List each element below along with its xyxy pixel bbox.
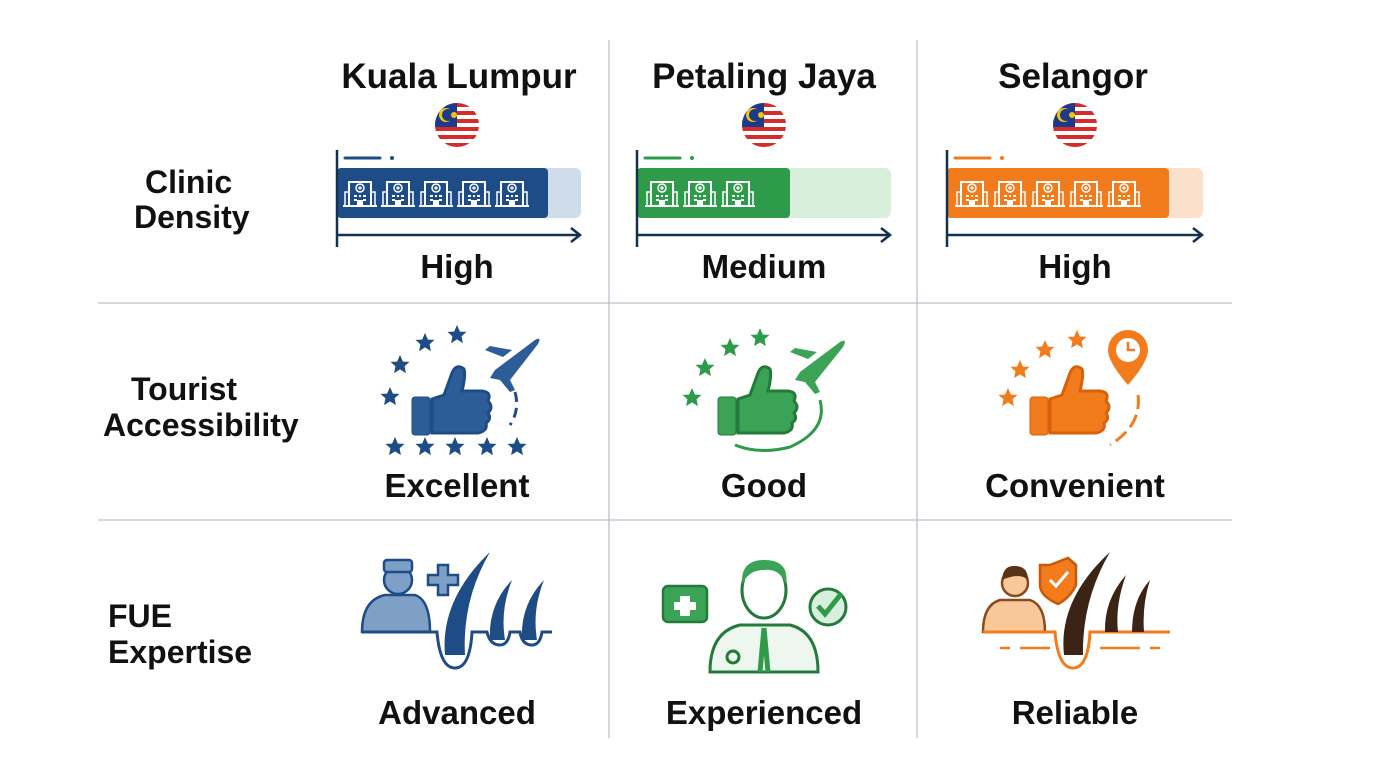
icon: Selangor thumbs up with stars and pin: Convenient: [985, 467, 1165, 504]
header: Selangor: [998, 57, 1148, 147]
icon: KL doctor and hair follicles: Advanced: [378, 694, 536, 731]
row label: Tourist Accessibility: Tourist: [131, 371, 237, 407]
icon: PJ doctor with medkit and check: [663, 560, 862, 731]
bar chart: Petaling Jaya Medium: Medium: [702, 248, 826, 285]
row label: Clinic Density: Density: [134, 199, 250, 235]
icon: KL thumbs up with stars and plane: Excellent: [385, 467, 529, 504]
row label: FUE Expertise: Expertise: [108, 634, 252, 670]
bar chart: Kuala Lumpur High: High: [420, 248, 494, 285]
row label: Clinic Density: Clinic: [145, 164, 232, 200]
icon: Selangor thumbs up with stars and pin: [985, 330, 1165, 504]
header: Kuala Lumpur: [341, 57, 577, 147]
bar chart: Selangor High: [947, 150, 1203, 285]
icon: KL doctor and hair follicles: [362, 552, 552, 731]
icon: Selangor person with shield and hair: [983, 552, 1170, 731]
header: Selangor: Selangor: [998, 57, 1148, 96]
grid lines: [98, 40, 1232, 738]
icon: PJ thumbs up with stars and plane: Good: [721, 467, 807, 504]
icon: KL thumbs up with stars and plane: [380, 325, 539, 504]
header: Kuala Lumpur: Kuala Lumpur: [341, 57, 577, 96]
bar chart: Selangor High: High: [1038, 248, 1112, 285]
bar chart: Kuala Lumpur High: [337, 150, 581, 285]
header: Petaling Jaya: Petaling Jaya: [652, 57, 876, 96]
row label: Tourist Accessibility: Accessibility: [103, 407, 299, 443]
row label: FUE Expertise: FUE: [108, 598, 172, 634]
icon: PJ doctor with medkit and check: Experienced: [666, 694, 862, 731]
bar chart: Petaling Jaya Medium: [637, 150, 891, 285]
icon: PJ thumbs up with stars and plane: [682, 328, 845, 504]
icon: Selangor person with shield and hair: Reliable: [1012, 694, 1138, 731]
header: Petaling Jaya: [652, 57, 876, 147]
